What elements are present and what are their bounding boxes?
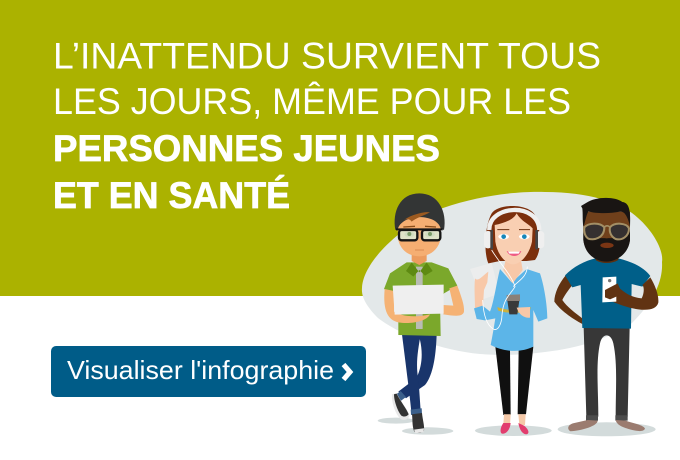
person: bearded man with phone — [554, 198, 658, 436]
left arm — [554, 275, 582, 324]
ground shadow — [558, 422, 656, 436]
right arm — [607, 277, 658, 310]
shirt — [384, 262, 457, 336]
person: woman with headphones and coffee — [470, 206, 552, 436]
legs — [495, 347, 511, 415]
ground shadow — [475, 425, 552, 436]
smile — [507, 251, 521, 256]
head — [583, 212, 630, 262]
ground shadows — [378, 418, 414, 424]
title — [53, 36, 601, 216]
person: man with beanie and laptop — [378, 193, 464, 435]
t-shirt — [565, 258, 650, 329]
trousers — [584, 327, 630, 417]
button label: Visualiser l'infographie — [67, 355, 334, 385]
coffee cup — [507, 294, 520, 314]
face — [495, 213, 533, 264]
hair — [581, 198, 630, 227]
beanie — [395, 193, 445, 230]
earphone cable — [483, 250, 527, 329]
title line 3 bold: PERSONNES JEUNES — [53, 128, 440, 169]
headphones — [489, 210, 539, 230]
belt — [497, 307, 531, 313]
face — [397, 215, 441, 256]
icon: chevron — [344, 364, 350, 380]
eyes — [498, 234, 509, 239]
background ellipse behind people — [362, 192, 662, 355]
mouth — [600, 243, 614, 248]
phone — [602, 277, 616, 302]
hair — [404, 212, 430, 222]
hand on cup — [517, 307, 530, 318]
title line 1: L’INATTENDU SURVIENT TOUS — [53, 36, 601, 76]
neck — [412, 253, 427, 265]
hand and arm left — [475, 272, 488, 310]
panel: green header background — [0, 0, 680, 296]
shoes — [568, 420, 598, 431]
top — [474, 269, 547, 351]
jeans — [398, 332, 437, 398]
tablet — [470, 263, 499, 300]
neck — [595, 247, 619, 263]
hair back — [485, 206, 540, 263]
arms — [384, 289, 430, 323]
glasses — [396, 229, 443, 240]
shoes — [501, 423, 511, 434]
eyebrows — [403, 224, 436, 229]
laptop — [393, 285, 444, 315]
title line 4 bold: ET EN SANTÉ — [53, 175, 290, 216]
sunglasses — [584, 224, 604, 239]
beard — [583, 227, 630, 262]
title line 2: LES JOURS, MÊME POUR LES — [53, 81, 571, 122]
button: visualiser l'infographie — [51, 346, 366, 397]
neck chest — [503, 258, 523, 283]
mouth — [415, 248, 424, 251]
sneakers — [392, 393, 409, 420]
